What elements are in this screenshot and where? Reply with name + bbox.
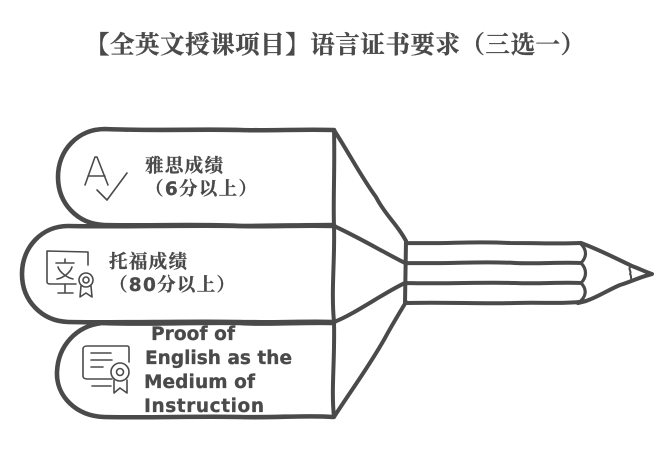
icon: pencil bbox=[405, 241, 652, 303]
title: 【全英文授课项目】语言证书要求（三选一） bbox=[85, 31, 585, 59]
panel: IELTS bbox=[58, 129, 334, 226]
text: MOI proof: Proof of bbox=[151, 324, 236, 345]
text: MOI proof: English as the bbox=[145, 348, 292, 369]
diagram: pencil-shaped option list bbox=[22, 129, 652, 417]
panel outline: IELTS bbox=[58, 129, 334, 226]
icon: A with check mark bbox=[85, 157, 127, 200]
icon: certificate with seal bbox=[83, 346, 129, 393]
funnel lines bbox=[334, 130, 406, 417]
text: TOEFL score bbox=[109, 252, 235, 296]
pencil tip bbox=[578, 243, 652, 303]
text: IELTS score: 雅思成绩 bbox=[145, 156, 223, 177]
pencil body bbox=[405, 241, 581, 303]
text: MOI proof: Instruction bbox=[144, 396, 264, 417]
panel: TOEFL bbox=[22, 226, 334, 322]
text: MOI proof bbox=[144, 324, 292, 417]
panel: MOI proof bbox=[57, 323, 334, 417]
divider line at panel ends bbox=[333, 130, 334, 417]
text: MOI proof: Medium of bbox=[144, 372, 256, 393]
text: TOEFL score: （80分以上） bbox=[109, 274, 235, 296]
text: IELTS score bbox=[145, 156, 257, 200]
text: IELTS score: （6分以上） bbox=[145, 178, 257, 200]
icon: language certificate bbox=[47, 251, 93, 297]
panel outline: MOI proof bbox=[57, 323, 334, 417]
pencil lead bbox=[629, 267, 632, 281]
panel outline: TOEFL bbox=[22, 226, 334, 322]
pencil ridges bbox=[578, 244, 586, 303]
text: TOEFL score: 托福成绩 bbox=[109, 252, 187, 273]
